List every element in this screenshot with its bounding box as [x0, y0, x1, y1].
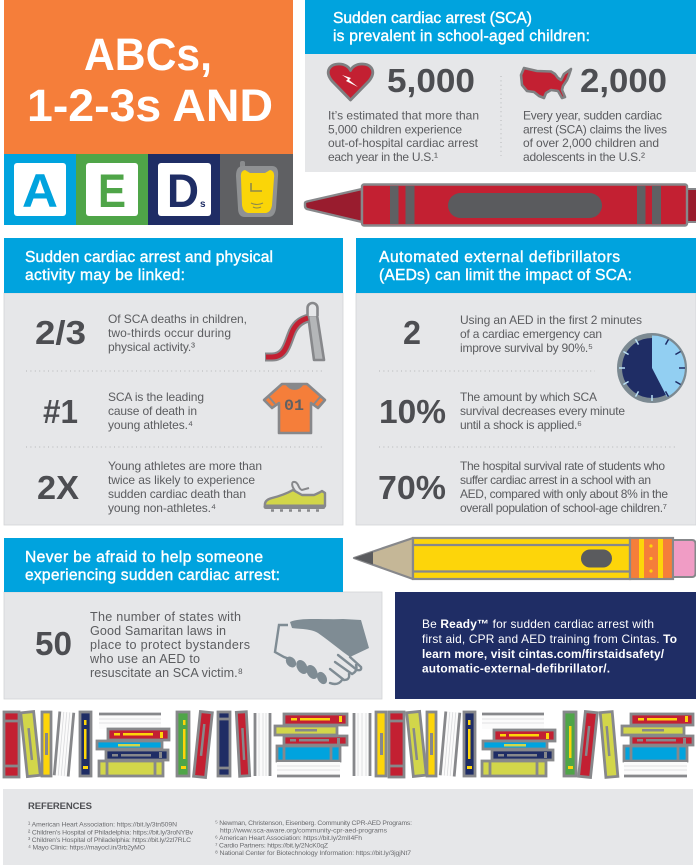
references list: left column: ⁴ Mayo Clinic: https://mayocl.in/3rb2yMO: [28, 844, 145, 852]
text: 2X description: Young athletes are more than: [108, 459, 262, 473]
icon: AED device: [220, 154, 293, 225]
references heading: REFERENCES: [28, 801, 92, 812]
text: 2X description: twice as likely to experience: [108, 473, 255, 487]
icon: jersey: 01: [284, 397, 304, 415]
text: 5,000 description: 5,000 children experience: [328, 122, 462, 136]
title text: 1-2-3s AND: [27, 80, 273, 131]
text: 2/3 description: physical activity.³: [108, 340, 195, 354]
text: 2X description: sudden cardiac death than: [108, 487, 246, 501]
heading: prevalence: is prevalent in school-aged children:: [333, 28, 590, 45]
text: #1 description: SCA is the leading: [108, 390, 204, 404]
text: 2,000 description: of over 2,000 children and: [523, 136, 659, 150]
text: 2/3 description: Of SCA deaths in children,: [108, 312, 247, 326]
title text: ABCs,: [84, 29, 212, 80]
text: 10% description: until a shock is applied.⁶: [460, 418, 582, 432]
icon: playground slide: [265, 303, 324, 360]
heading: prevalence: Sudden cardiac arrest (SCA): [333, 10, 532, 27]
text: #1 description: young athletes.⁴: [108, 418, 193, 432]
panel: SCA prevalence: [305, 0, 696, 172]
callout text: Be Ready™ for sudden cardiac arrest with: [422, 617, 654, 631]
AEDs letter tiles: [4, 154, 293, 225]
callout text: learn more, visit cintas.com/firstaidsafety/: [422, 647, 665, 661]
text: 2,000 description: arrest (SCA) claims the lives: [523, 122, 667, 136]
icon: jersey: [264, 384, 325, 433]
references list: left column: ² Children’s Hospital of Philadelphia: https://bit.ly/3roNYBv: [28, 829, 194, 836]
heading: physical activity: Sudden cardiac arrest and physical: [25, 249, 273, 266]
stat: 5,000: 5,000: [387, 62, 475, 99]
tile: A: A: [22, 164, 58, 217]
books: group one: [4, 712, 347, 777]
icon: US map: [521, 68, 571, 98]
crayon illustration: [305, 184, 696, 226]
stat: 2,000: 2,000: [580, 62, 667, 99]
tile: E: E: [98, 164, 126, 217]
pencil illustration: [354, 538, 696, 579]
panel: references: [3, 789, 693, 865]
illustration: row of books: [4, 711, 693, 777]
stat: 50: 50: [35, 625, 72, 662]
references list: right column: ⁷ Cardio Partners: https://bit.ly/2NcK0qZ: [215, 842, 328, 850]
text: 5,000 description: It’s estimated that more than: [328, 108, 479, 122]
stat: 10%: 10%: [379, 393, 446, 430]
heading: AED impact: (AEDs) can limit the impact of SCA:: [379, 267, 632, 284]
heading: never be afraid: experiencing sudden cardiac arrest:: [25, 567, 280, 584]
stat: 2/3: 2/3: [35, 314, 86, 351]
text: 2X description: young non-athletes.⁴: [108, 501, 216, 515]
tile: A: [4, 154, 76, 225]
books: group two: [354, 711, 693, 777]
callout: Cintas training: [395, 592, 696, 699]
text: 2/3 description: two-thirds occur during: [108, 326, 231, 340]
references list: left column: ³ Children’s Hospital of Philadelphia: https://bit.ly/2zl7RLC: [28, 837, 191, 844]
stat: #1: #1: [43, 393, 78, 430]
book spine details: group one: [27, 716, 342, 769]
references list: right column: http://www.sca-aware.org/community-cpr-aed-programs: [220, 828, 388, 835]
icon: heart with bolt: [328, 64, 373, 100]
panel: AED impact: [356, 238, 696, 525]
panel: Good Samaritan: [4, 538, 382, 699]
heading: AED impact: Automated external defibrillators: [379, 249, 620, 266]
references list: right column: ⁸ National Center for Biotechnology Information: https://bit.ly/3jgjNt7: [215, 850, 411, 857]
text: 2,000 description: Every year, sudden cardiac: [523, 108, 662, 122]
text: 2 minutes description: improve survival by 90%.⁵: [460, 341, 593, 355]
callout text: automatic-external-defibrillator/.: [422, 662, 610, 676]
text: 10% description: survival decreases every minute: [460, 404, 625, 418]
text: 50 description: place to protect bystanders: [90, 638, 250, 652]
icon: cleat shoe: [264, 482, 326, 510]
tile: Ds: s: [200, 199, 206, 210]
references list: right column: ⁶ American Heart Association: https://bit.ly/2mII4Fh: [215, 835, 362, 842]
tile: E: [76, 154, 148, 225]
heading: never be afraid: Never be afraid to help someone: [25, 549, 263, 566]
text: 5,000 description: out-of-hospital cardiac arrest: [328, 136, 479, 150]
text: 70% description: suffer cardiac arrest in a school with an: [460, 473, 651, 487]
text: 50 description: Good Samaritan laws in: [90, 624, 226, 638]
panel: physical activity: [4, 238, 343, 525]
text: 10% description: The amount by which SCA: [460, 390, 597, 404]
text: 50 description: The number of states with: [90, 610, 241, 624]
text: 2 minutes description: Using an AED in the first 2 minutes: [460, 313, 642, 327]
text: 5,000 description: each year in the U.S.¹: [328, 150, 438, 164]
heading: physical activity: activity may be linked:: [25, 267, 185, 284]
text: 70% description: overall population of school-age children.⁷: [460, 501, 667, 515]
tile: Ds: [148, 154, 220, 225]
title text: [27, 29, 273, 131]
references list: right column: ⁵ Newman, Christenson, Eisenberg. Community CPR-AED Programs:: [215, 820, 412, 827]
book spine details: group two: [380, 716, 688, 769]
tile: Ds: D: [167, 164, 199, 217]
text: 70% description: The hospital survival rate of students who: [460, 459, 665, 473]
icon: clock: [619, 335, 685, 401]
text: #1 description: cause of death in: [108, 404, 197, 418]
text: 70% description: AED, compared with only about 8% in the: [460, 487, 668, 501]
stat: 2X: 2X: [37, 469, 79, 506]
title block: [4, 0, 293, 154]
stat: 70%: 70%: [378, 469, 446, 506]
text: 2,000 description: adolescents in the U.S.²: [523, 150, 645, 164]
icon: handshake: [275, 619, 369, 686]
text: 50 description: resuscitate an SCA victim.⁸: [90, 666, 243, 680]
text: 50 description: who use an AED to: [89, 652, 200, 666]
stat: 2: 2: [403, 314, 421, 351]
callout text: first aid, CPR and AED training from Cintas. To: [422, 632, 677, 646]
text: 2 minutes description: of a cardiac emergency can: [460, 327, 602, 341]
references list: left column: ¹ American Heart Association: https://bit.ly/3tn509N: [28, 822, 177, 829]
